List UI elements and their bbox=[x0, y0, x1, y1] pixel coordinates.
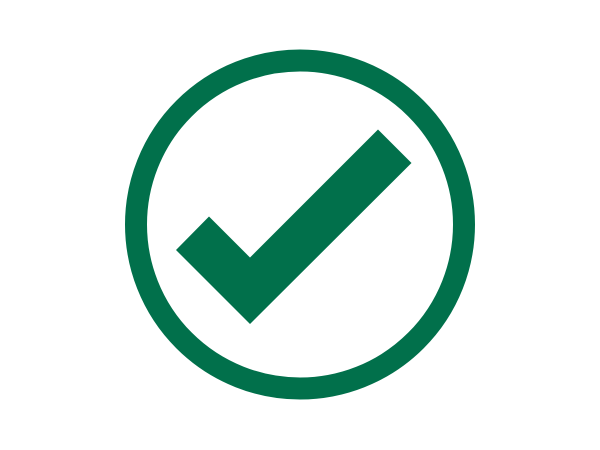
icon: check mark bbox=[176, 130, 412, 324]
icon: circle ring bbox=[136, 60, 464, 388]
